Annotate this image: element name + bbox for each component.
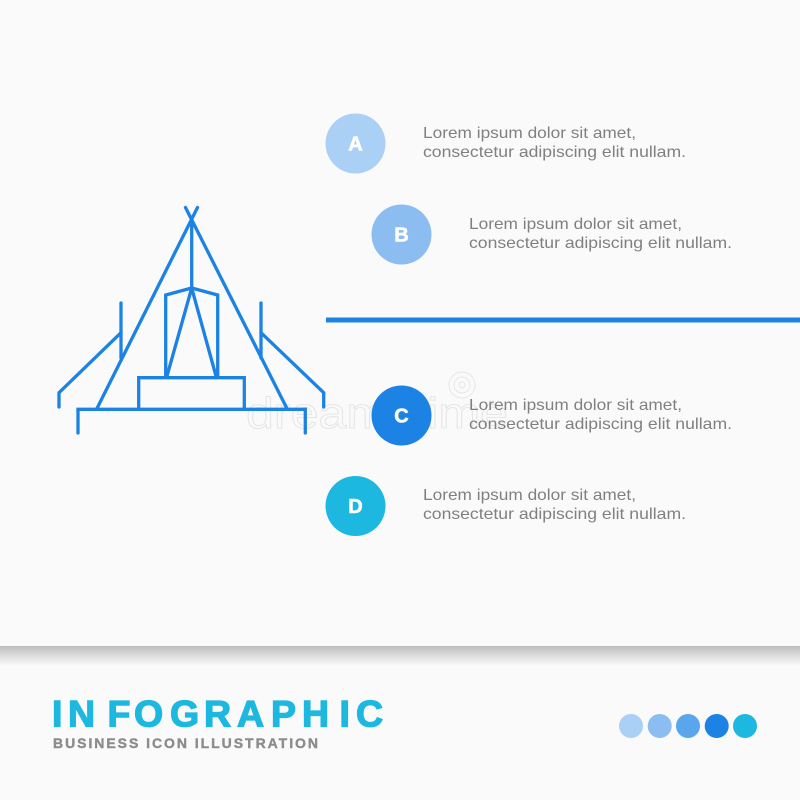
watermark: dreamstime xyxy=(246,389,508,438)
badge B xyxy=(372,204,432,264)
text D: consectetur adipiscing elit nullam. xyxy=(423,506,686,523)
tent door flaps xyxy=(167,288,216,376)
tent right pole xyxy=(186,208,287,408)
footer shadow band xyxy=(0,646,800,666)
tent left pole xyxy=(97,208,198,409)
left stake xyxy=(119,303,123,358)
text A xyxy=(423,125,686,161)
text A: Lorem ipsum dolor sit amet, xyxy=(423,125,636,142)
tent door frame xyxy=(166,288,218,376)
divider line xyxy=(326,318,800,322)
item D xyxy=(326,476,686,536)
item C xyxy=(372,386,732,446)
colour dots xyxy=(619,714,757,738)
text B xyxy=(469,216,732,252)
icon: tent xyxy=(59,208,324,433)
watermark xyxy=(246,372,508,438)
badge C xyxy=(372,386,432,446)
text D: Lorem ipsum dolor sit amet, xyxy=(423,487,636,504)
title: INFOGRAPHIC xyxy=(52,692,383,734)
badge A xyxy=(326,114,386,174)
text D xyxy=(423,487,686,523)
text B: consectetur adipiscing elit nullam. xyxy=(469,235,732,252)
text C: consectetur adipiscing elit nullam. xyxy=(469,416,732,433)
text C: Lorem ipsum dolor sit amet, xyxy=(469,397,682,414)
tent centre line xyxy=(190,218,193,288)
badge D xyxy=(326,476,386,536)
right guy rope xyxy=(261,333,324,407)
text C xyxy=(469,397,732,433)
subtitle: BUSINESS ICON ILLUSTRATION xyxy=(53,735,318,751)
badge B: B xyxy=(394,224,409,246)
badge A: A xyxy=(348,134,363,156)
tent base xyxy=(78,409,305,433)
tent step xyxy=(139,378,244,409)
text A: consectetur adipiscing elit nullam. xyxy=(423,144,686,161)
right stake xyxy=(259,303,263,358)
badge D: D xyxy=(348,496,363,518)
badge C: C xyxy=(394,406,409,428)
text B: Lorem ipsum dolor sit amet, xyxy=(469,216,682,233)
item A xyxy=(326,114,686,174)
left guy rope xyxy=(59,333,121,407)
item B xyxy=(372,204,732,264)
